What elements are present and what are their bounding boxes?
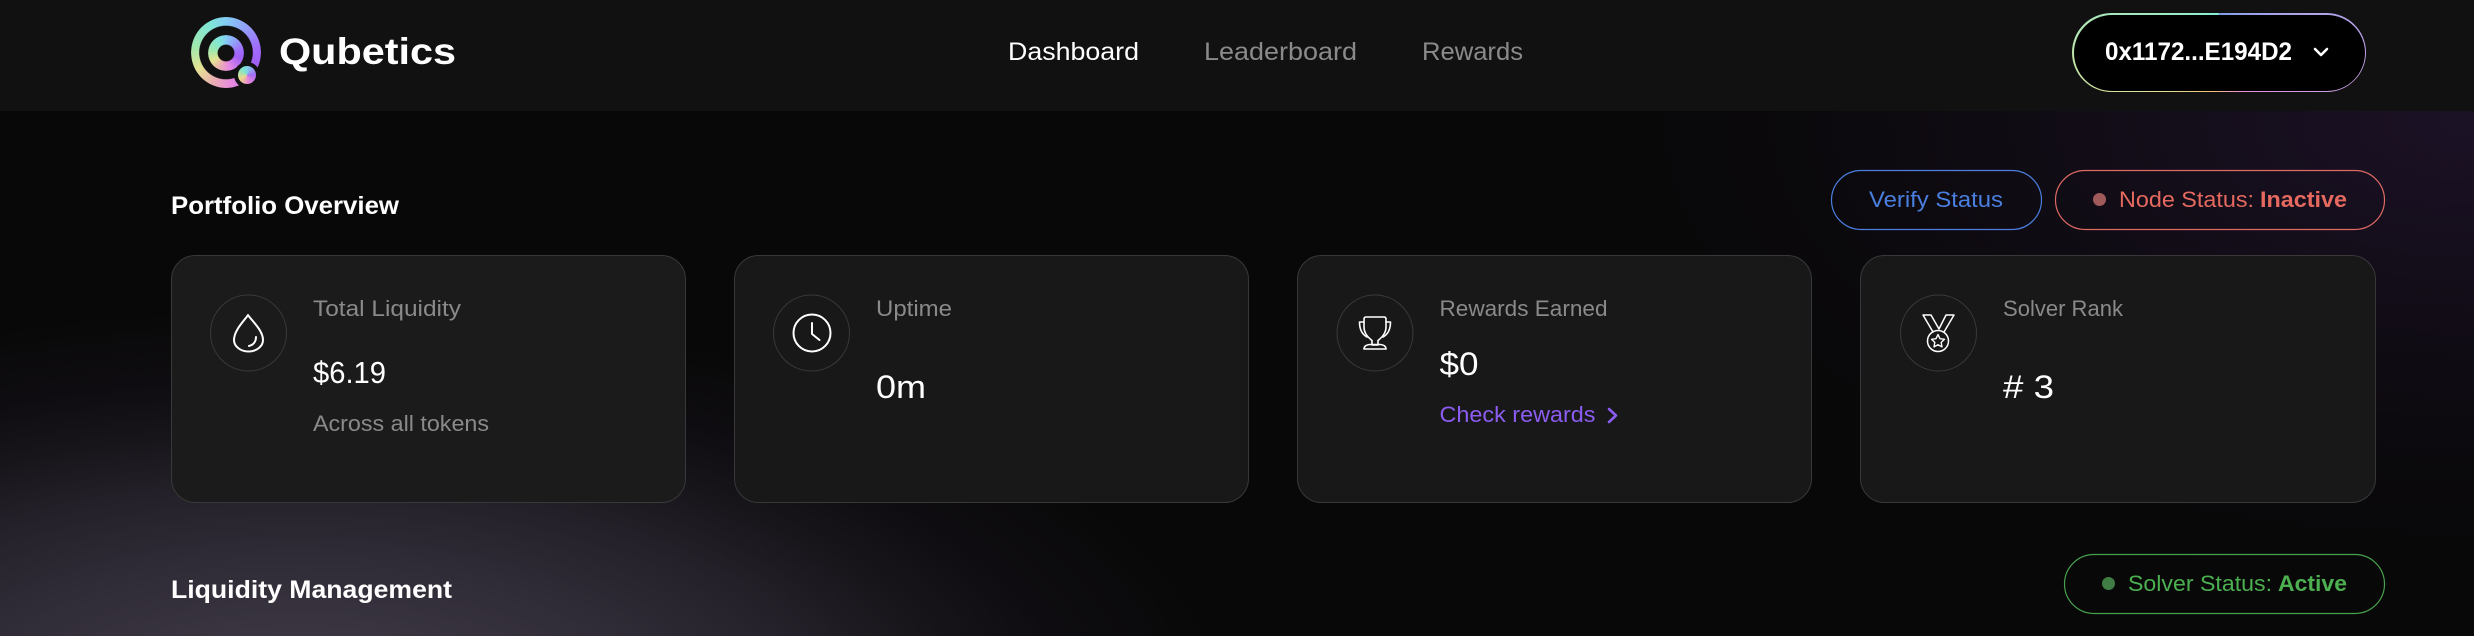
badge: solver status: Active bbox=[2278, 571, 2347, 596]
label: solver rank: Solver Rank bbox=[2003, 296, 2124, 321]
label: uptime: Uptime bbox=[876, 296, 952, 321]
panel: total liquidity bbox=[172, 256, 686, 502]
wallet address: 0x1172...E194D2 bbox=[2105, 38, 2292, 66]
badge: solver status bbox=[2064, 554, 2384, 614]
button: verify status bbox=[1832, 170, 2042, 230]
icon: wallet chevron bbox=[2315, 49, 2327, 55]
heading: liquidity management: Liquidity Management bbox=[171, 576, 453, 604]
badge: solver status: Solver Status: bbox=[2128, 571, 2272, 596]
panel: solver rank bbox=[1860, 256, 2376, 502]
heading: portfolio overview: Portfolio Overview bbox=[171, 192, 400, 220]
icon: water drop bbox=[210, 295, 286, 371]
logo mark bbox=[191, 17, 261, 88]
icon: trophy bbox=[1337, 295, 1413, 371]
nav: rewards: Rewards bbox=[1422, 38, 1523, 66]
navigation bbox=[1008, 38, 1523, 66]
panel: rewards earned bbox=[1298, 256, 1812, 502]
link: check rewards: Check rewards bbox=[1440, 402, 1596, 427]
nav: dashboard: Dashboard bbox=[1008, 38, 1139, 66]
label: rewards earned: Rewards Earned bbox=[1440, 296, 1608, 321]
value: rewards: $0 bbox=[1440, 346, 1478, 382]
brand name: Qubetics bbox=[279, 31, 456, 72]
nav: leaderboard: Leaderboard bbox=[1204, 38, 1357, 66]
wallet button border bbox=[2072, 13, 2366, 92]
button: verify status: Verify Status bbox=[1869, 187, 2003, 212]
header bar bbox=[0, 0, 2474, 111]
icon: clock bbox=[774, 295, 850, 371]
note: across all tokens: Across all tokens bbox=[313, 411, 489, 436]
icon: medal bbox=[1900, 295, 1976, 371]
badge: node status bbox=[2056, 170, 2384, 230]
value: uptime: 0m bbox=[876, 369, 926, 405]
badge: node status: Inactive bbox=[2260, 187, 2347, 212]
value: rank: # 3 bbox=[2003, 369, 2054, 405]
badge: node status: Node Status: bbox=[2119, 187, 2254, 212]
value: liquidity: $6.19 bbox=[313, 355, 386, 390]
panel: uptime bbox=[734, 256, 1248, 502]
label: total liquidity: Total Liquidity bbox=[313, 296, 461, 321]
